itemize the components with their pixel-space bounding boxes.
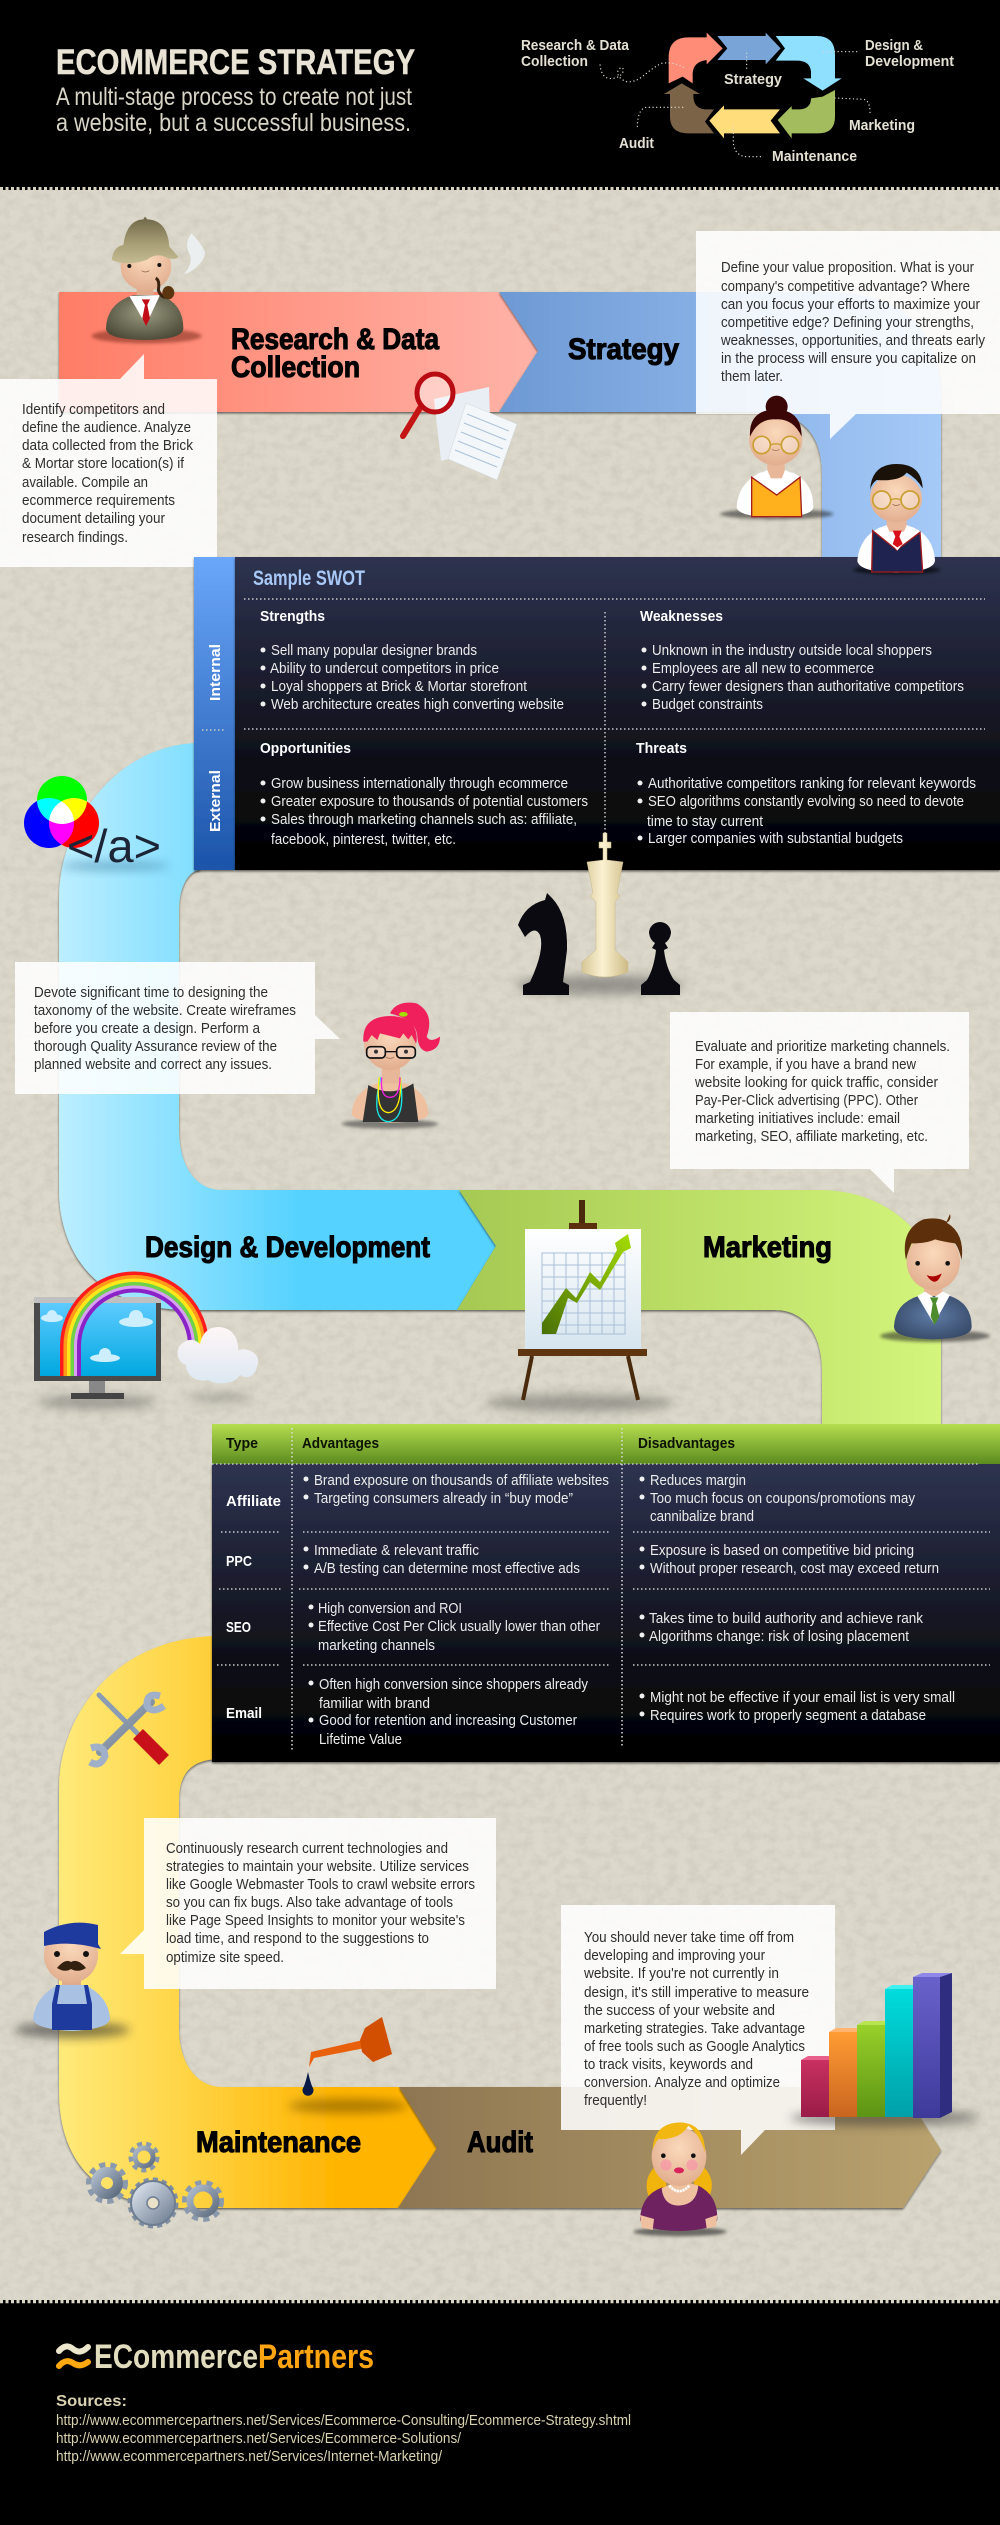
callout: marketing: marketing initiatives include: email <box>695 1110 900 1127</box>
heading: marketing: Marketing <box>703 1231 832 1264</box>
callout: audit <box>561 1905 835 2155</box>
row: ppc: A/B testing can determine most effective ads <box>314 1560 580 1577</box>
strengths: Ability to undercut competitors in price <box>270 660 499 677</box>
front paper <box>448 403 517 480</box>
heading: research and data collection <box>231 323 439 384</box>
opportunities: Sales through marketing channels such as: affiliate, <box>271 811 577 828</box>
row: affiliate: Affiliate <box>226 1493 281 1510</box>
table header: Advantages <box>302 1435 379 1452</box>
row: email: Lifetime Value <box>319 1731 402 1748</box>
gear left <box>89 2165 125 2201</box>
icon: easel with growth chart <box>485 1200 675 1412</box>
row: affiliate: Too much focus on coupons/promotions may <box>650 1490 915 1507</box>
character: audit woman <box>633 2122 727 2236</box>
logo: ECommerce Partners: ECommerce <box>94 2338 258 2376</box>
row: ppc: Exposure is based on competitive bid pricing <box>650 1542 914 1559</box>
heading: maintenance: Maintenance <box>196 2126 361 2159</box>
row: affiliate <box>226 1472 915 1525</box>
weaknesses: Budget constraints <box>652 696 763 713</box>
monitor <box>34 1297 161 1399</box>
callout: research: research findings. <box>22 529 128 546</box>
panel: sample SWOT <box>194 557 1000 870</box>
callout: maintenance: Continuously research current technologies and <box>166 1840 448 1857</box>
callout: research: & Mortar store location(s) if <box>22 455 185 472</box>
table header <box>212 1424 1000 1464</box>
threats: time to stay current <box>647 813 764 830</box>
sources: http://www.ecommercepartners.net/Services/Ecommerce-Consulting/Ecommerce-Strategy.shtml <box>56 2413 631 2429</box>
black pawn <box>641 922 680 995</box>
icon: gears <box>89 2144 221 2226</box>
row: affiliate: cannibalize brand <box>650 1508 754 1525</box>
strengths: Web architecture creates high converting website <box>271 696 564 713</box>
panel: marketing channels table <box>212 1424 1000 1762</box>
opportunities: Opportunities <box>260 740 351 757</box>
callout: strategy <box>696 231 1000 439</box>
subtitle: A multi-stage process to create not just <box>56 83 412 111</box>
row: ppc: Immediate & relevant traffic <box>314 1542 479 1559</box>
strengths <box>260 608 564 713</box>
character: marketing man <box>880 1214 990 1342</box>
heading: design and development: Design & Development <box>145 1231 430 1264</box>
callout: audit: You should never take time off from <box>584 1929 794 1946</box>
band: research and data collection <box>59 292 538 412</box>
callout: maintenance: optimize site speed. <box>166 1949 284 1966</box>
heading: research and data collection: Research & Data <box>231 323 439 356</box>
process cycle diagram <box>521 33 954 165</box>
callout: audit: design, it's still imperative to measure <box>584 1984 809 2001</box>
callout: research <box>0 354 217 567</box>
weaknesses: Unknown in the industry outside local shoppers <box>652 642 932 659</box>
strengths: Loyal shoppers at Brick & Mortar storefront <box>271 678 528 695</box>
row: affiliate: Reduces margin <box>650 1472 746 1489</box>
callout: marketing: Evaluate and prioritize marketing channels. <box>695 1038 950 1055</box>
cloud <box>177 1327 258 1383</box>
callout: research: define the audience. Analyze <box>22 419 191 436</box>
table header: Disadvantages <box>638 1435 735 1452</box>
character: mechanic <box>14 1923 130 2038</box>
row: ppc <box>226 1542 939 1577</box>
band: strategy <box>499 292 941 560</box>
callout: design: before you create a design. Perform a <box>34 1020 261 1037</box>
icon: monitor with rainbow and cloud <box>34 1274 258 1409</box>
sources: Sources: <box>56 2393 127 2410</box>
heading: strategy: Strategy <box>568 333 679 366</box>
cycle arrows <box>600 33 870 157</box>
character: designer woman <box>342 1003 440 1129</box>
callout: strategy: Define your value proposition. What is your <box>721 259 974 276</box>
opportunities: facebook, pinterest, twitter, etc. <box>271 831 456 848</box>
callout: maintenance: like Page Speed Insights to monitor your website's <box>166 1912 465 1929</box>
opportunities <box>260 740 588 848</box>
row: email: familiar with brand <box>319 1695 430 1712</box>
sources <box>56 2393 631 2465</box>
callout: maintenance: like Google Webmaster Tools to crawl website errors <box>166 1876 475 1893</box>
cycle labels: Collection <box>521 53 588 70</box>
callout: design <box>15 962 340 1094</box>
cycle labels: Maintenance <box>772 148 857 165</box>
row: affiliate: Targeting consumers already in “buy mode” <box>314 1490 573 1507</box>
weaknesses: Employees are all new to ecommerce <box>652 660 874 677</box>
callout: maintenance: strategies to maintain your website. Utilize services <box>166 1858 469 1875</box>
icon: chess pieces <box>515 833 685 995</box>
strengths: Sell many popular designer brands <box>271 642 477 659</box>
callout: marketing: website looking for quick traffic, consider <box>694 1074 938 1091</box>
row: email: Might not be effective if your email list is very small <box>650 1689 955 1706</box>
gear small <box>131 2144 157 2170</box>
callout: audit: developing and improving your <box>584 1947 765 1964</box>
title: ECOMMERCE STRATEGY <box>56 43 415 82</box>
row: seo: Algorithms change: risk of losing placement <box>649 1628 910 1645</box>
strengths: Strengths <box>260 608 325 625</box>
swot heading: Sample SWOT <box>253 567 365 590</box>
callout: strategy: company's competitive advantage? Where <box>721 278 970 295</box>
weaknesses: Carry fewer designers than authoritative competitors <box>652 678 964 695</box>
callout: strategy: in the process will ensure you capitalize on <box>721 350 976 367</box>
callout: design: thorough Quality Assurance review of the <box>34 1038 277 1055</box>
icon: wrench and screwdriver <box>90 1695 164 1764</box>
callout: audit: to track visits, keywords and <box>584 2056 753 2073</box>
icon: closing anchor tag: </a> <box>67 820 161 872</box>
row: seo: Effective Cost Per Click usually lower than other <box>318 1618 600 1635</box>
callout: audit: frequently! <box>584 2092 647 2109</box>
callout: research: document detailing your <box>22 510 165 527</box>
character: strategy woman <box>720 396 833 519</box>
swot label internal: Internal <box>207 644 224 701</box>
rainbow <box>62 1274 207 1376</box>
row: email: Email <box>226 1705 262 1722</box>
callout: research: available. Compile an <box>22 474 148 491</box>
callout: marketing: Pay-Per-Click advertising (PPC). Other <box>695 1092 918 1109</box>
row: email: Good for retention and increasing Customer <box>319 1712 577 1729</box>
character: strategy man <box>853 464 940 575</box>
threats <box>636 740 976 847</box>
callout: maintenance <box>120 1818 496 1989</box>
black knight <box>518 893 569 995</box>
callout: research: ecommerce requirements <box>22 492 175 509</box>
subtitle <box>56 83 412 137</box>
subtitle: a website, but a successful business. <box>56 109 411 137</box>
row: seo: marketing channels <box>318 1637 435 1654</box>
cycle labels: Strategy <box>724 71 783 88</box>
callout: research: Identify competitors and <box>22 401 165 418</box>
cycle labels: Development <box>865 53 954 70</box>
callout: design: taxonomy of the website. Create wireframes <box>34 1002 296 1019</box>
band: design and development <box>59 743 496 1310</box>
band: audit <box>398 2087 941 2208</box>
chart: 3D rising bars <box>790 1973 980 2126</box>
cycle labels: Research & Data <box>521 37 630 54</box>
row: seo: SEO <box>226 1619 251 1636</box>
row: affiliate: Brand exposure on thousands of affiliate websites <box>314 1472 609 1489</box>
opportunities: Greater exposure to thousands of potential customers <box>271 793 588 810</box>
band: maintenance <box>59 1636 437 2208</box>
callout: maintenance: so you can fix bugs. Also take advantage of tools <box>166 1894 453 1911</box>
cycle labels: Audit <box>619 135 654 152</box>
table body <box>212 1464 1000 1762</box>
callout: design: planned website and correct any issues. <box>34 1056 272 1073</box>
band: marketing <box>457 1190 941 1430</box>
row: seo: High conversion and ROI <box>318 1600 462 1617</box>
callout: strategy: them later. <box>721 368 783 385</box>
white king <box>582 833 628 977</box>
threats: SEO algorithms constantly evolving so need to devote <box>648 793 964 810</box>
back paper <box>434 387 491 461</box>
row: email <box>226 1676 955 1748</box>
callout: marketing: marketing, SEO, affiliate marketing, etc. <box>695 1128 928 1145</box>
strip <box>194 557 235 870</box>
table header: Type <box>226 1435 258 1452</box>
logo: ECommerce Partners: Partners <box>258 2338 374 2376</box>
gear right <box>185 2183 221 2219</box>
icon: oil can and drop <box>288 2017 408 2113</box>
callout: audit: the success of your website and <box>584 2002 775 2019</box>
heading: audit: Audit <box>467 2126 533 2159</box>
opportunities: Grow business internationally through ecommerce <box>271 775 568 792</box>
cycle labels <box>521 37 954 165</box>
footer band <box>0 2300 1000 2525</box>
weaknesses: Weaknesses <box>640 608 723 625</box>
callout: maintenance: load time, and respond to the suggestions to <box>166 1930 429 1947</box>
cycle labels: Marketing <box>849 117 915 134</box>
row: seo <box>226 1600 923 1654</box>
threats: Threats <box>636 740 687 757</box>
callout: marketing: For example, if you have a brand new <box>695 1056 916 1073</box>
header band <box>0 0 1000 190</box>
callout: strategy: competitive edge? Defining your strengths, <box>721 314 974 331</box>
callout: audit: website. If you're not currently in <box>583 1965 779 1982</box>
character: detective <box>92 217 205 343</box>
weaknesses <box>640 608 964 713</box>
cycle labels: Design & <box>865 37 923 54</box>
swot label external: External <box>207 770 224 832</box>
sources: http://www.ecommercepartners.net/Services/Ecommerce-Solutions/ <box>56 2431 462 2447</box>
logo: ECommerce Partners <box>59 2338 374 2376</box>
icon: magnifying glass and papers <box>403 374 517 480</box>
row: ppc: Without proper research, cost may exceed return <box>650 1560 939 1577</box>
row: seo: Takes time to build authority and achieve rank <box>649 1610 923 1627</box>
callout: design: Devote significant time to designing the <box>34 984 268 1001</box>
sources: http://www.ecommercepartners.net/Services/Internet-Marketing/ <box>56 2449 443 2465</box>
callout: audit: conversion. Analyze and optimize <box>584 2074 780 2091</box>
callout: marketing <box>670 1012 969 1193</box>
callout: audit: marketing strategies. Take advantage <box>584 2020 805 2037</box>
logo mark <box>59 2346 88 2366</box>
threats: Larger companies with substantial budgets <box>648 830 903 847</box>
magnifier <box>403 374 453 436</box>
row: ppc: PPC <box>226 1553 252 1570</box>
icon: colour circles <box>24 776 99 848</box>
callout: audit: of free tools such as Google Analytics <box>584 2038 805 2055</box>
row: email: Requires work to properly segment a database <box>650 1707 926 1724</box>
panel background <box>235 557 1000 870</box>
heading: research and data collection: Collection <box>231 351 360 384</box>
callout: research: data collected from the Brick <box>22 437 193 454</box>
gear big <box>130 2180 176 2226</box>
row: email: Often high conversion since shoppers already <box>319 1676 588 1693</box>
